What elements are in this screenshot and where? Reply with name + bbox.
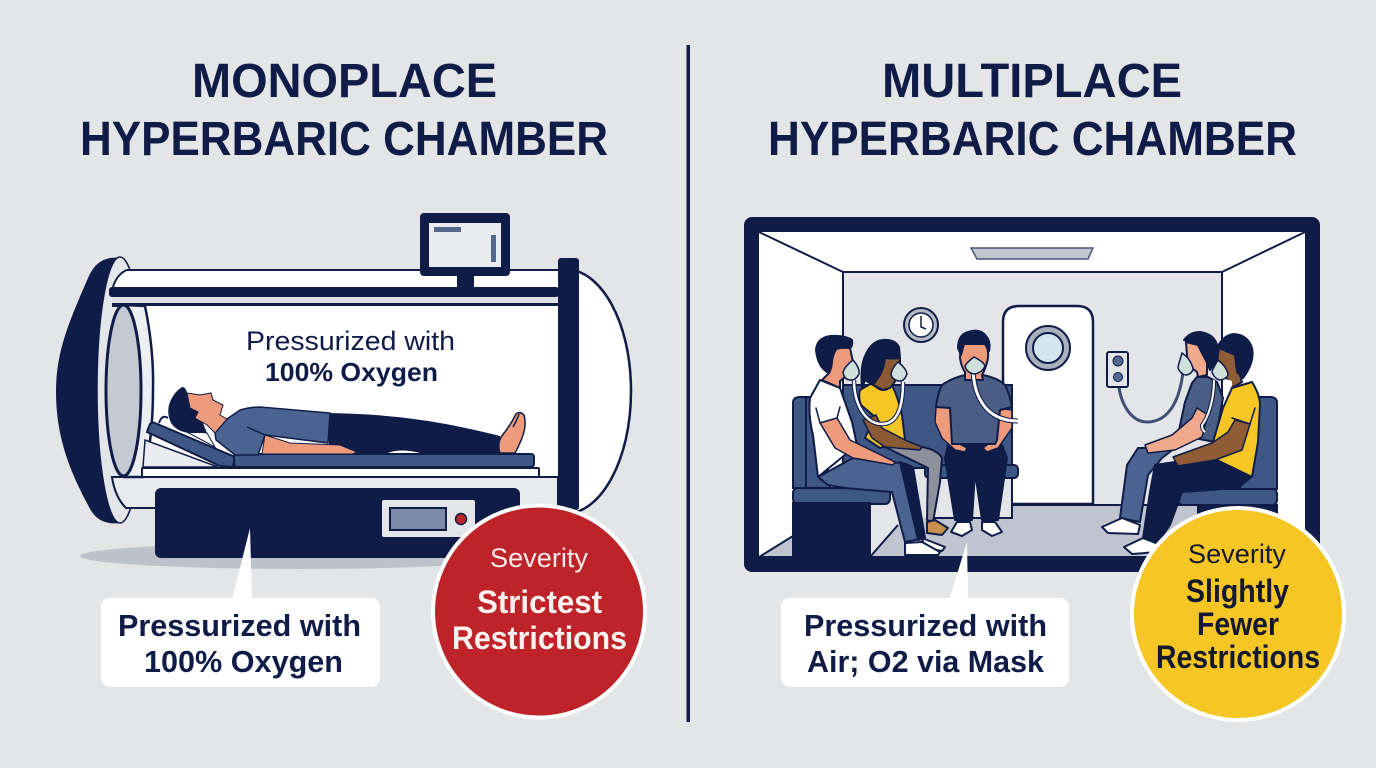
callout: monoplace: 100% Oxygen xyxy=(144,644,343,679)
lying patient xyxy=(168,387,525,455)
arm xyxy=(262,435,357,454)
severity badge: yellow: Severity xyxy=(1188,539,1286,569)
floor xyxy=(759,505,1305,557)
severity badge: yellow: Fewer xyxy=(1197,606,1279,642)
monitor stand xyxy=(457,274,474,288)
patient bed xyxy=(142,417,539,477)
oxygen masks and hoses xyxy=(843,353,1232,432)
severity badge: red: Restrictions xyxy=(452,620,627,656)
hair xyxy=(168,387,207,433)
oxygen outlet and hose xyxy=(1107,352,1183,422)
title: monoplace xyxy=(80,55,608,166)
monoplace chamber illustration xyxy=(56,213,631,558)
title: monoplace: MONOPLACE xyxy=(192,55,497,108)
chamber text: Pressurized with xyxy=(246,326,455,356)
divider line xyxy=(686,45,690,722)
person: woman in yellow xyxy=(859,340,948,535)
callout: multiplace: Pressurized with xyxy=(804,608,1047,643)
callout: multiplace xyxy=(781,542,1069,687)
pants xyxy=(329,413,500,453)
person: man in grey shirt xyxy=(1102,332,1223,534)
floor shadow xyxy=(80,543,520,569)
back wall xyxy=(843,272,1222,505)
callout: multiplace: Air; O2 via Mask xyxy=(807,644,1045,679)
wall below bench xyxy=(870,503,1012,557)
multiplace cabin illustration xyxy=(744,217,1320,572)
callout: monoplace: Pressurized with xyxy=(118,608,361,643)
base cabinet xyxy=(155,488,520,558)
chamber body xyxy=(112,270,565,508)
title: multiplace xyxy=(768,55,1297,166)
title: multiplace: HYPERBARIC CHAMBER xyxy=(768,113,1297,166)
severity badge: red: Severity xyxy=(490,543,588,573)
face and neck xyxy=(187,393,227,433)
door opening xyxy=(106,305,141,476)
severity badge: red: Strictest xyxy=(477,584,602,620)
monitor xyxy=(420,213,510,276)
benches xyxy=(793,385,1277,558)
top rail xyxy=(109,287,559,297)
door surround xyxy=(124,305,153,477)
severity badge: yellow: Restrictions xyxy=(1156,639,1320,675)
right dome xyxy=(570,270,631,513)
end flange xyxy=(56,258,122,523)
door xyxy=(1003,306,1093,504)
severity badge: yellow xyxy=(1132,508,1344,720)
ceiling light xyxy=(971,248,1093,259)
perspective lines xyxy=(759,232,1305,272)
interior xyxy=(145,306,560,477)
chamber text: 100% Oxygen xyxy=(265,357,438,387)
lower body band xyxy=(112,477,558,508)
person: centre man xyxy=(935,331,1012,536)
person: man in white shirt xyxy=(809,336,945,555)
callout: monoplace xyxy=(101,528,380,687)
chamber text xyxy=(246,326,455,387)
cabin frame xyxy=(744,217,1320,572)
end post xyxy=(558,258,579,510)
shirt xyxy=(215,407,330,455)
flange ring xyxy=(97,257,143,523)
title: monoplace: HYPERBARIC CHAMBER xyxy=(80,113,608,166)
severity badge: yellow: Slightly xyxy=(1186,573,1289,609)
severity badge: red xyxy=(433,506,645,718)
wall clock xyxy=(904,308,938,342)
feet xyxy=(499,413,525,453)
person: man in yellow shirt xyxy=(1124,334,1260,554)
title: multiplace: MULTIPLACE xyxy=(882,55,1182,108)
